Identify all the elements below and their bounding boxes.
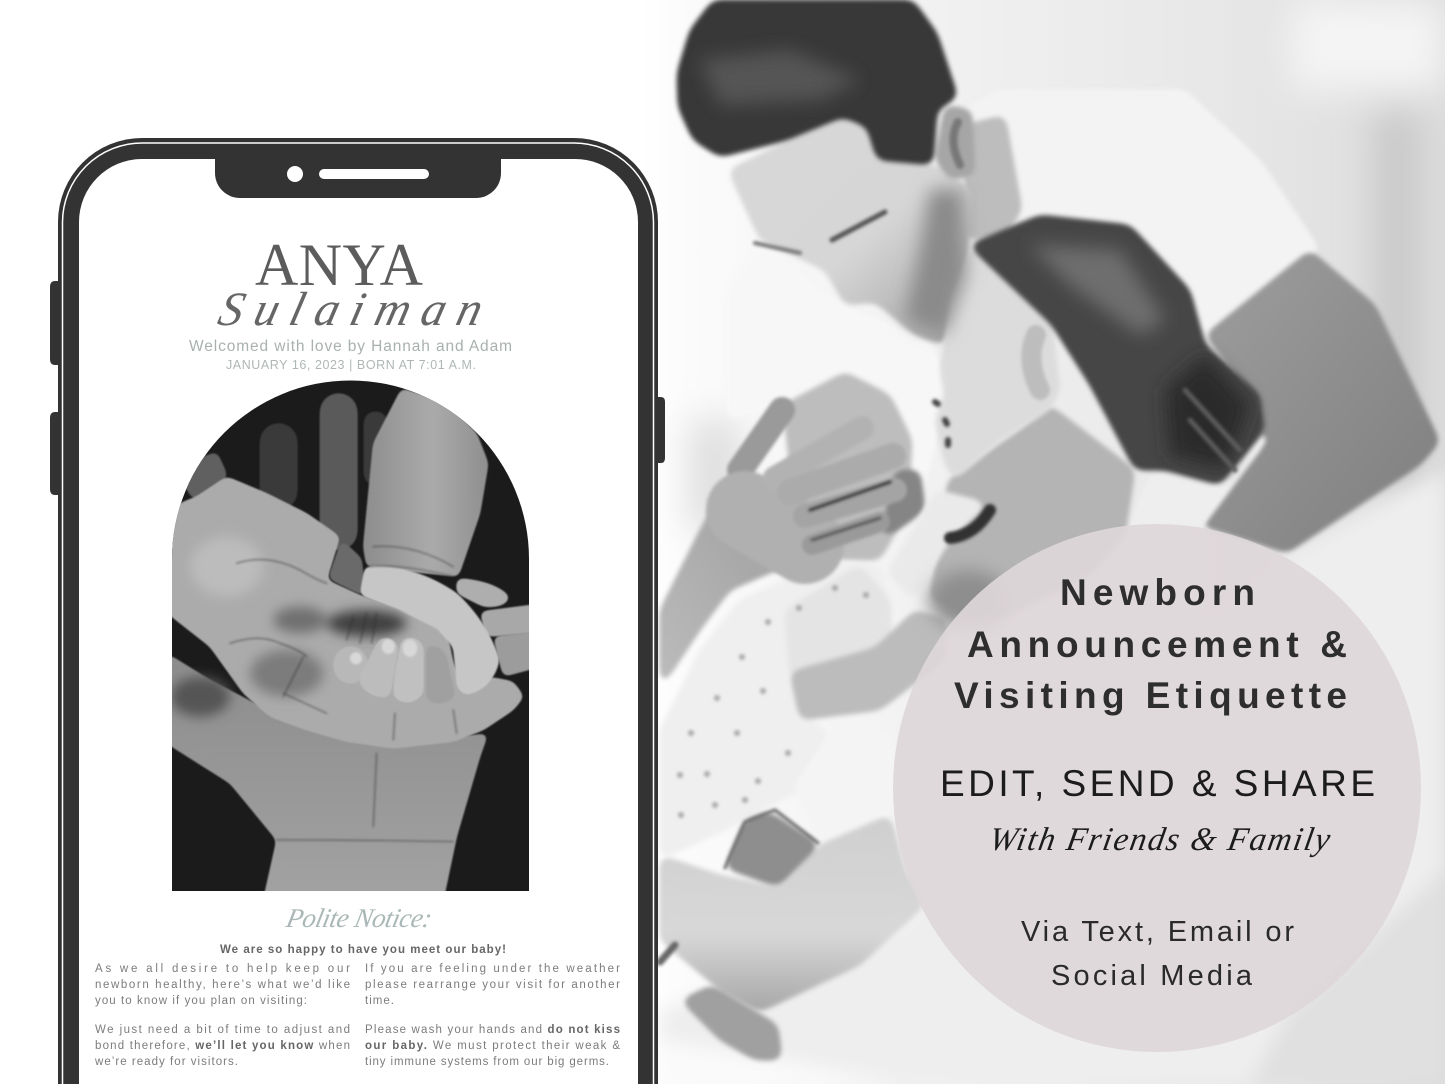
callout title: Newborn xyxy=(1060,572,1255,613)
sharing channels xyxy=(1021,916,1294,992)
camera xyxy=(287,166,303,182)
left column paragraphs: bond therefore, we’ll let you know when xyxy=(95,1040,350,1052)
phone side buttons xyxy=(50,281,665,495)
polite notice heading: Polite Notice: xyxy=(283,903,435,933)
left column paragraphs xyxy=(94,963,350,1068)
baby arm xyxy=(363,388,488,577)
phone xyxy=(50,138,665,1084)
man's arm xyxy=(1200,250,1440,553)
surname: Sulaiman xyxy=(213,283,489,336)
woman's face xyxy=(935,245,1060,480)
callout title: Visiting Etiquette xyxy=(954,675,1347,716)
callout title xyxy=(954,572,1347,716)
translucent circle xyxy=(893,524,1421,1052)
sharing channels: Via Text, Email or xyxy=(1021,916,1294,948)
right column paragraphs: please rearrange your visit for another xyxy=(365,979,620,991)
woman's top xyxy=(793,723,893,840)
right side fingers xyxy=(457,578,510,607)
upper hand xyxy=(163,477,524,748)
left column paragraphs: we’re ready for visitors. xyxy=(94,1056,238,1068)
right column paragraphs: Please wash your hands and do not kiss xyxy=(365,1024,620,1036)
phone screen xyxy=(79,159,638,1084)
first name: ANYA xyxy=(255,232,423,298)
phone notch xyxy=(215,156,501,198)
left column paragraphs: newborn healthy, here’s what we’d like xyxy=(95,979,350,991)
onesie xyxy=(660,560,892,860)
collar xyxy=(887,490,988,600)
skin creases xyxy=(230,546,457,842)
left column paragraphs: As we all desire to help keep our xyxy=(95,963,350,975)
onesie dots xyxy=(677,585,869,818)
right column paragraphs: If you are feeling under the weather xyxy=(365,963,620,975)
phone body xyxy=(58,138,658,1084)
web of thumb xyxy=(330,544,364,594)
right column paragraphs: our baby. We must protect their weak & xyxy=(365,1040,620,1052)
pillow near bun xyxy=(1125,430,1275,535)
family photo background xyxy=(640,0,1445,1084)
hand fingers and details xyxy=(660,122,1240,962)
right column paragraphs: time. xyxy=(365,995,394,1007)
sharing channels: Social Media xyxy=(1051,960,1253,992)
man's neck xyxy=(965,115,1022,240)
background fingers xyxy=(183,393,387,550)
callout title: Announcement & xyxy=(967,624,1347,665)
baby foot xyxy=(680,985,782,1060)
woman's neck and chest xyxy=(930,405,1135,620)
people xyxy=(660,0,1440,1060)
baby arm xyxy=(790,610,948,720)
welcome line: Welcomed with love by Hannah and Adam xyxy=(189,338,512,355)
man's face xyxy=(728,117,972,345)
baby hand xyxy=(360,566,499,695)
right column paragraphs: tiny immune systems from our big germs. xyxy=(365,1056,609,1068)
man's hair xyxy=(677,0,958,165)
man's shirt xyxy=(960,90,1320,335)
date line: JANUARY 16, 2023 | BORN AT 7:01 A.M. xyxy=(226,358,476,372)
arched photo: hands xyxy=(163,380,540,900)
fingernails xyxy=(350,639,417,664)
notice lead line: We are so happy to have you meet our baby! xyxy=(220,944,506,956)
edit send share: EDIT, SEND & SHARE xyxy=(940,763,1375,804)
left column paragraphs: We just need a bit of time to adjust and xyxy=(95,1024,350,1036)
woman's arm xyxy=(660,815,925,1012)
lower hand xyxy=(167,653,488,900)
speaker xyxy=(319,169,429,179)
bedding xyxy=(660,470,1445,1084)
left column paragraphs: you to know if you plan on visiting: xyxy=(95,995,307,1007)
woman's hair xyxy=(968,215,1265,485)
baby fingers xyxy=(333,646,368,684)
notice text xyxy=(94,944,620,1068)
baby leg xyxy=(725,812,820,887)
circle callout xyxy=(893,524,1421,1052)
baby's head xyxy=(783,372,912,560)
with friends and family: With Friends & Family xyxy=(987,821,1333,858)
forearm xyxy=(660,470,800,690)
right column paragraphs xyxy=(365,963,620,1068)
soft tonal shading xyxy=(700,50,1250,630)
announcement name heading xyxy=(189,232,512,372)
ear xyxy=(935,105,975,180)
soft shading of thumb and palm xyxy=(170,537,407,717)
